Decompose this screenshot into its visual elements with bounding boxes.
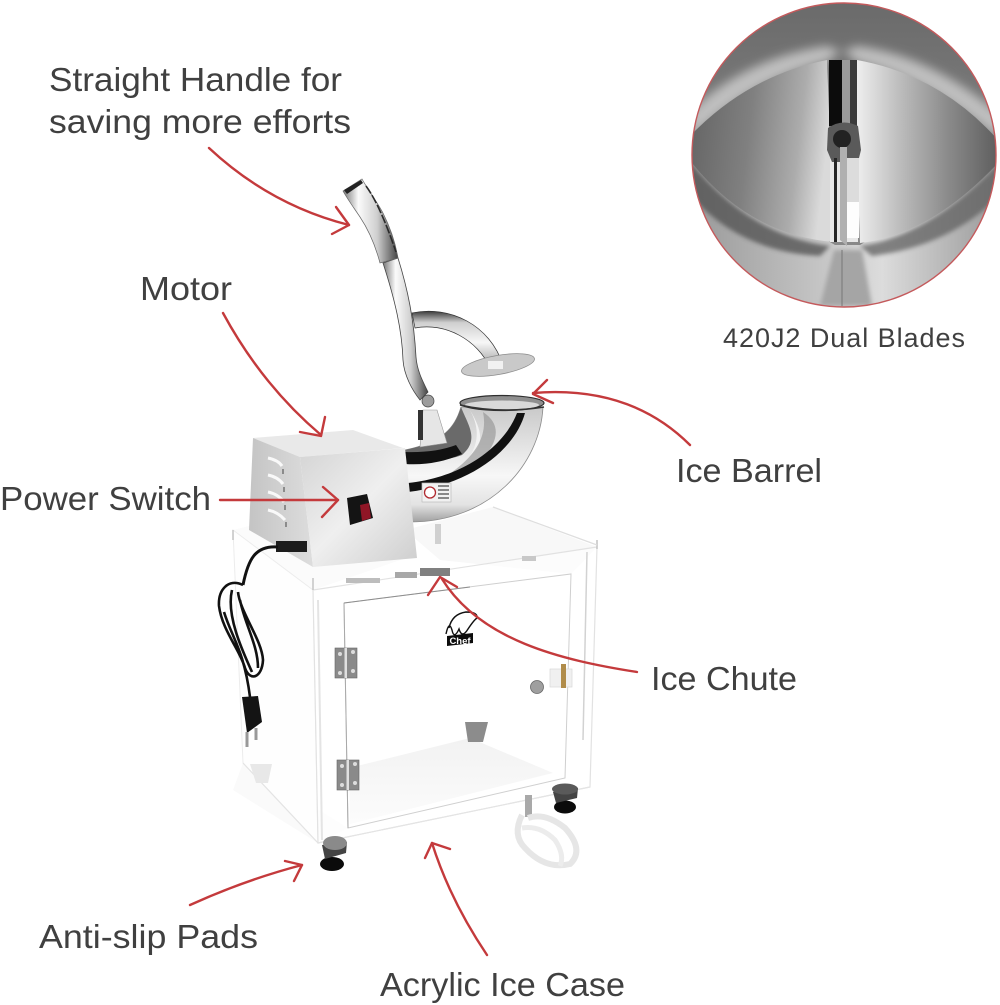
housing side — [249, 438, 313, 567]
case top hardware — [346, 556, 536, 583]
label: straight handle: Straight Handle for — [49, 61, 342, 98]
front foot — [320, 836, 347, 871]
arrow: ice chute — [428, 577, 637, 672]
pivot bolt — [422, 395, 434, 407]
arrow: straight handle — [209, 148, 349, 234]
inset: dual blades close-up — [690, 0, 1000, 310]
arrow: power switch — [220, 487, 338, 517]
arrow: acrylic ice case — [425, 843, 487, 955]
door knob — [530, 680, 544, 694]
presser arm arc — [412, 311, 503, 368]
presser disc — [460, 349, 536, 381]
gray plug in case — [465, 722, 488, 742]
label: acrylic ice case: Acrylic Ice Case — [380, 966, 625, 1003]
machine: acrylic ice case — [233, 507, 597, 871]
label: dual blades: 420J2 Dual Blades — [723, 323, 965, 353]
case floor — [349, 738, 553, 824]
machine: ice barrel — [405, 396, 544, 544]
label: power switch: Power Switch — [0, 480, 211, 517]
pivot mount — [420, 410, 447, 447]
housing top — [253, 430, 403, 457]
arrow: motor — [223, 313, 325, 436]
housing front — [300, 448, 417, 567]
label: anti-slip pads: Anti-slip Pads — [39, 918, 258, 955]
handle grip — [343, 179, 398, 263]
label: motor: Motor — [140, 270, 232, 307]
arrow: ice barrel — [533, 380, 690, 445]
power switch — [347, 494, 373, 525]
machine: handle — [343, 179, 536, 447]
barrel body — [405, 407, 543, 522]
barrel mount stub — [435, 524, 441, 544]
label: ice barrel: Ice Barrel — [676, 452, 822, 489]
arrow: anti-slip pads — [190, 861, 302, 905]
right foot — [552, 784, 578, 814]
power cord — [219, 541, 307, 747]
warning sticker — [422, 483, 451, 502]
lever arm — [383, 258, 428, 400]
cord plug — [242, 696, 262, 747]
hinge upper — [335, 648, 357, 678]
hinge lower — [337, 760, 359, 790]
label: straight handle: saving more efforts — [49, 103, 351, 140]
door — [344, 574, 571, 828]
latch — [550, 664, 572, 688]
machine: motor housing — [219, 430, 417, 747]
logo: We Chef: Chef — [449, 636, 471, 647]
label: ice chute: Ice Chute — [651, 660, 797, 697]
rear foot ghost — [250, 764, 272, 783]
label: straight handle — [49, 61, 351, 140]
drain tube — [518, 795, 576, 866]
logo: We Chef — [446, 612, 477, 647]
barrel rim — [460, 396, 544, 410]
